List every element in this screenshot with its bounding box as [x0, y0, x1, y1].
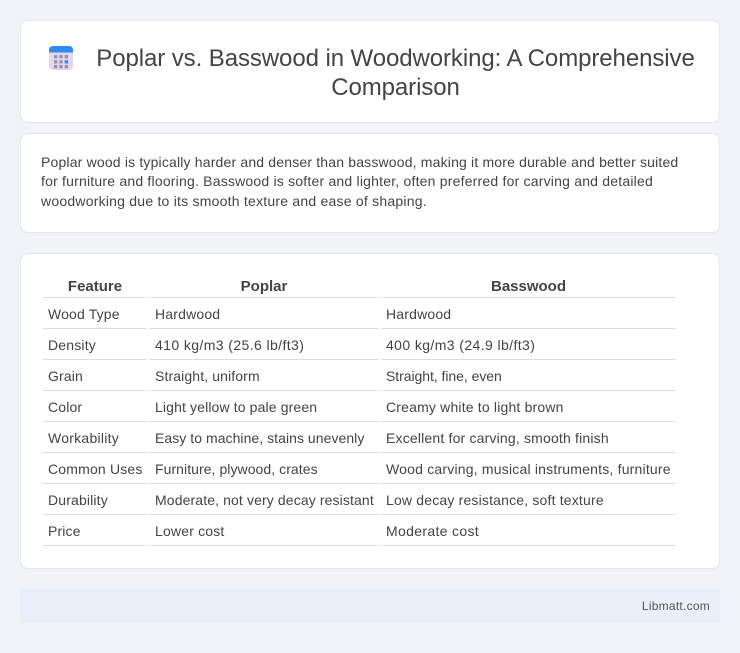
table header: Basswood — [491, 278, 566, 295]
panel: title card — [20, 20, 720, 123]
row: common uses: Common Uses — [48, 461, 143, 477]
footer credit: Libmatt.com — [642, 599, 710, 613]
row: common uses: Wood carving, musical instruments, furniture — [386, 461, 671, 477]
table header — [68, 278, 566, 295]
row: workability: Easy to machine, stains unevenly — [155, 430, 364, 446]
row: wood type: Hardwood — [155, 306, 220, 322]
row: durability — [48, 492, 604, 508]
row: grain — [48, 368, 502, 384]
text block: summary — [41, 154, 678, 209]
row: price: Moderate cost — [386, 523, 479, 539]
row: grain: Straight, fine, even — [386, 368, 502, 384]
row: wood type — [48, 306, 451, 322]
row: color: Light yellow to pale green — [155, 399, 317, 415]
row: durability: Durability — [48, 492, 108, 508]
row: common uses — [48, 461, 671, 477]
row: density: Density — [48, 337, 96, 353]
row: density — [48, 337, 535, 353]
row: grain: Grain — [48, 368, 83, 384]
row: wood type: Wood Type — [48, 306, 120, 322]
row: grain: Straight, uniform — [155, 368, 260, 384]
footer bar — [20, 589, 720, 623]
row: color — [48, 399, 564, 415]
table header: Poplar — [241, 278, 287, 295]
row: durability: Low decay resistance, soft texture — [386, 492, 604, 508]
text block: summary: woodworking due to its smooth texture and ease of shaping. — [41, 193, 427, 209]
row: price: Price — [48, 523, 81, 539]
row: price — [48, 523, 479, 539]
row: durability: Moderate, not very decay resistant — [155, 492, 374, 508]
row: common uses: Furniture, plywood, crates — [155, 461, 318, 477]
text block: summary: Poplar wood is typically harder and denser than basswood, making it more durable and better suited — [41, 154, 678, 170]
row: workability: Excellent for carving, smooth finish — [386, 430, 609, 446]
panel: comparison table card — [20, 253, 720, 569]
row: price: Lower cost — [155, 523, 224, 539]
table header: Feature — [68, 278, 122, 295]
panel: summary card — [20, 133, 720, 233]
row: color: Creamy white to light brown — [386, 399, 564, 415]
text block: summary: for furniture and flooring. Basswood is softer and lighter, often preferred for carving and detailed — [41, 173, 653, 189]
row: density: 400 kg/m3 (24.9 lb/ft3) — [386, 337, 535, 353]
row: wood type: Hardwood — [386, 306, 451, 322]
row: density: 410 kg/m3 (25.6 lb/ft3) — [155, 337, 304, 353]
icon: calendar — [49, 46, 73, 70]
row: workability: Workability — [48, 430, 119, 446]
row: color: Color — [48, 399, 82, 415]
row: workability — [48, 430, 609, 446]
title: Poplar vs. Basswood in Woodworking: A Comprehensive — [96, 45, 695, 72]
title — [96, 45, 695, 101]
title: Comparison — [331, 74, 460, 101]
